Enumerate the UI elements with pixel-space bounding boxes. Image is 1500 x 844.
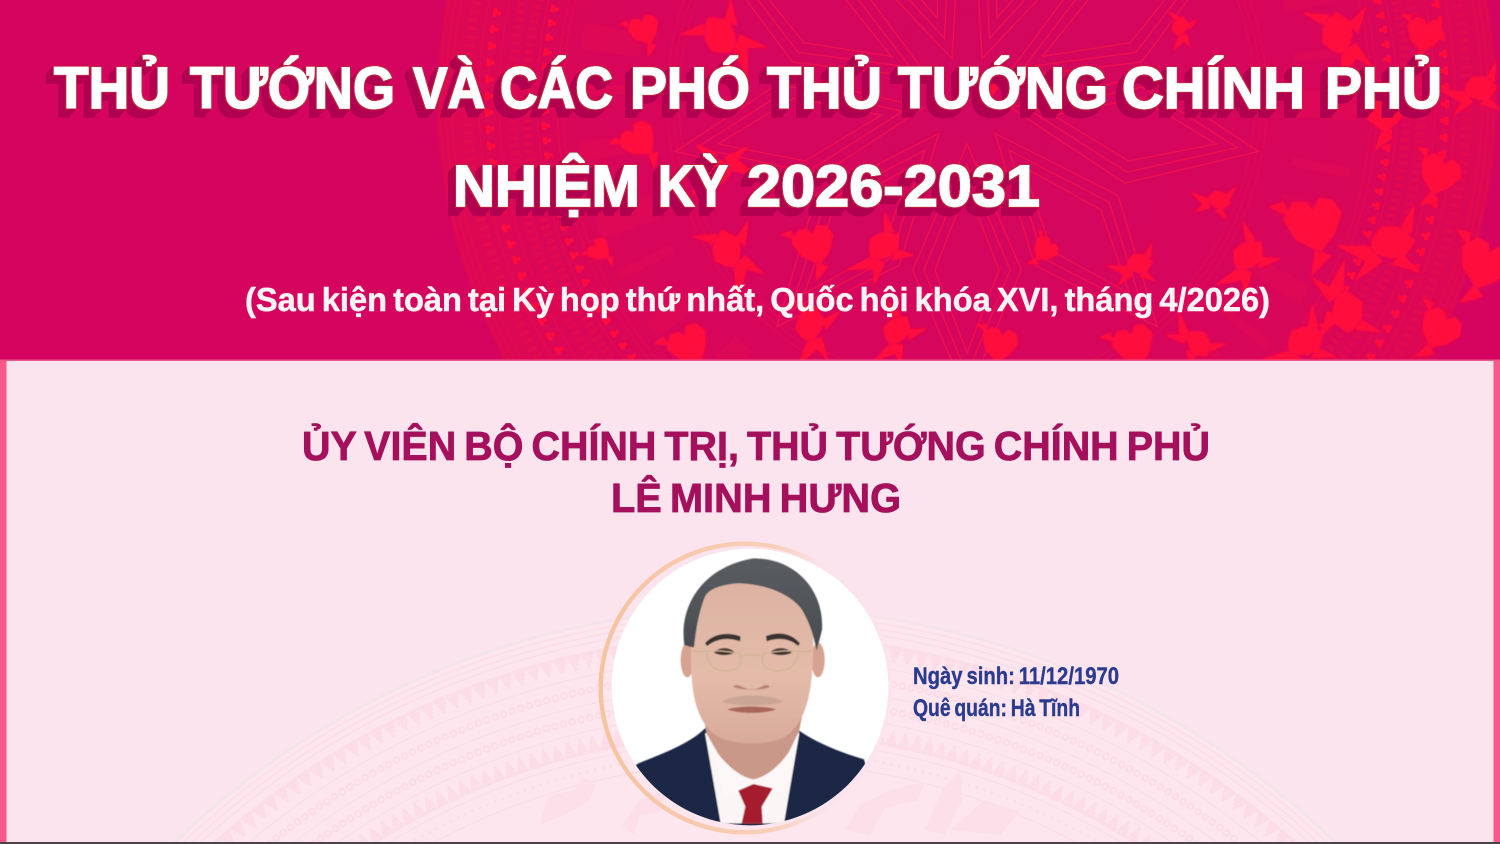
title line 1: THỦ [54, 56, 170, 121]
bottom edge [0, 842, 1500, 844]
section heading [302, 423, 1210, 521]
birth date: Ngày sinh: 11/12/1970 [913, 663, 1119, 690]
title line 1: PHỦ [1325, 56, 1442, 121]
watermark: emblem birds [540, 770, 1020, 835]
title line 1: THỦ [767, 56, 882, 121]
title line 1: VÀ [413, 56, 485, 121]
lower panel background [0, 361, 1500, 844]
subtitle: (Sau kiện toàn tại Kỳ họp thứ nhất, Quốc hội khóa XVI, tháng 4/2026) [245, 281, 1270, 318]
biography details [913, 663, 1119, 722]
portrait backing [612, 549, 888, 825]
title line 1: TƯỚNG [898, 56, 1108, 121]
person photo illustration [636, 558, 866, 826]
title line 2: KỲ [658, 154, 728, 219]
title line 1: CÁC [500, 56, 613, 121]
watermark: drum emblem [173, 608, 1337, 844]
header band [0, 0, 1500, 360]
main title [54, 56, 1442, 219]
title line 1: CHÍNH [1122, 56, 1305, 121]
home town: Quê quán: Hà Tĩnh [913, 695, 1080, 722]
title line 1: PHÓ [630, 56, 750, 121]
heading line 2: LÊ MINH HƯNG [611, 475, 901, 521]
heading line 1: ỦY VIÊN BỘ CHÍNH TRỊ, THỦ TƯỚNG CHÍNH PHỦ [302, 423, 1210, 469]
drum emblem pattern [437, 0, 1500, 360]
title line 1: TƯỚNG [190, 56, 395, 121]
side bar left [0, 360, 6, 844]
header bottom edge [0, 360, 1500, 361]
side bar right [1494, 360, 1500, 844]
portrait [601, 544, 889, 832]
portrait ring [601, 544, 889, 832]
title line 2: NHIỆM [453, 154, 640, 219]
title line 2: 2026-2031 [747, 154, 1040, 219]
